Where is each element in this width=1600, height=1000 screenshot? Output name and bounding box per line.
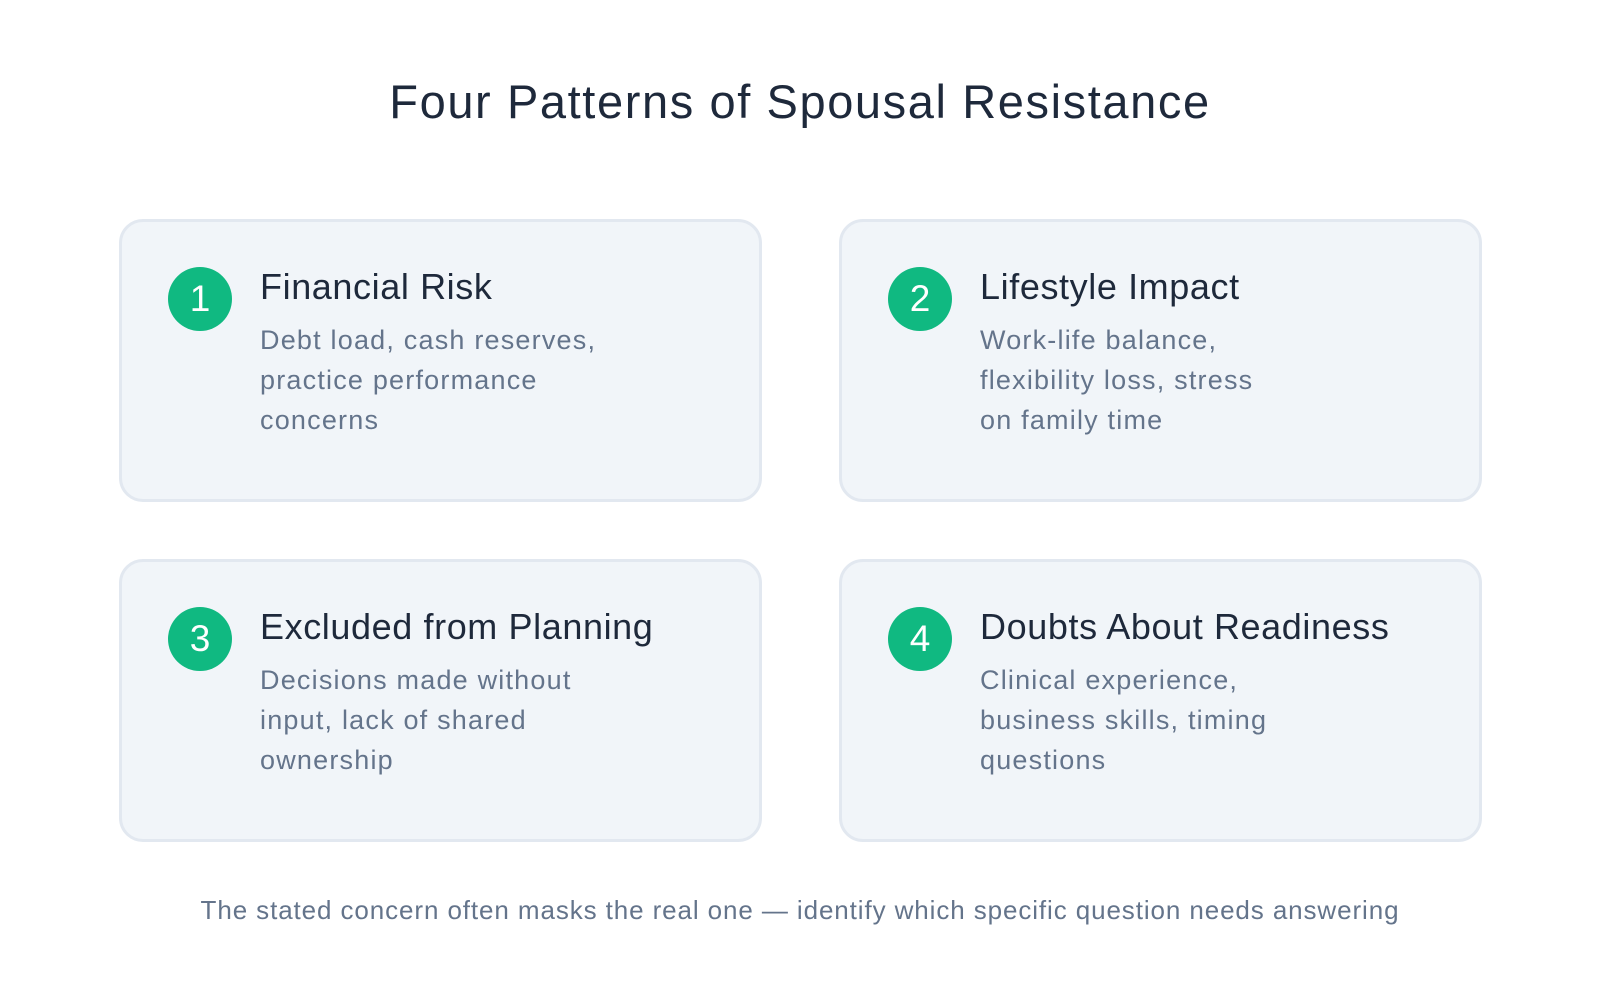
text: financial risk description: Debt load, cash reserves, practice performance concerns	[260, 325, 596, 435]
title: Four Patterns of Spousal Resistance	[389, 75, 1211, 128]
icon: number 4	[888, 607, 952, 671]
icon: number 3: 3	[190, 618, 210, 659]
panel: financial risk	[119, 219, 762, 502]
heading: excluded from planning: Excluded from Planning	[260, 606, 653, 647]
icon: number 3	[168, 607, 232, 671]
heading: doubts about readiness: Doubts About Readiness	[980, 606, 1389, 647]
icon: number 2: 2	[910, 278, 930, 319]
heading: financial risk: Financial Risk	[260, 266, 492, 307]
panel: lifestyle impact	[839, 219, 1482, 502]
text: lifestyle description: Work-life balance, flexibility loss, stress on family time	[980, 325, 1253, 435]
panel: excluded from planning	[119, 559, 762, 842]
icon: number 2	[888, 267, 952, 331]
footer note: The stated concern often masks the real one — identify which specific question needs answering	[201, 895, 1399, 925]
text: readiness description: Clinical experience, business skills, timing questions	[980, 665, 1267, 775]
text: excluded description: Decisions made without input, lack of shared ownership	[260, 665, 572, 775]
icon: number 1	[168, 267, 232, 331]
panel: doubts about readiness	[839, 559, 1482, 842]
icon: number 1: 1	[190, 278, 210, 319]
icon: number 4: 4	[910, 618, 930, 659]
heading: lifestyle impact: Lifestyle Impact	[980, 266, 1240, 307]
